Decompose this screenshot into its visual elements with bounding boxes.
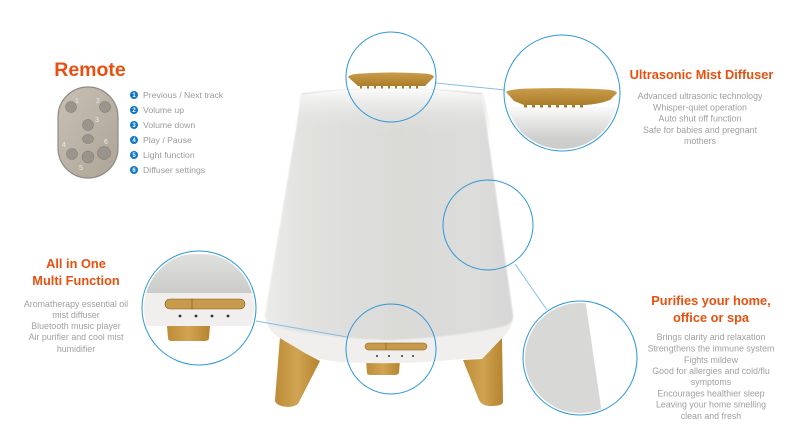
text: ultrasonic list: Whisper-quiet operation bbox=[653, 102, 747, 112]
remote legend: 3 bbox=[132, 123, 136, 129]
text: purifies list: Brings clarity and relaxation bbox=[657, 332, 765, 342]
heading: All in One Multi Function: All in One bbox=[46, 256, 106, 271]
text: purifies list: Encourages healthier sleep bbox=[657, 388, 765, 398]
heading: Remote: Remote bbox=[54, 59, 126, 81]
remote control image: 3 bbox=[95, 117, 99, 124]
text: multi function list: humidifier bbox=[57, 344, 95, 354]
text: ultrasonic list bbox=[638, 91, 763, 146]
connector: side to zoom bbox=[515, 264, 547, 310]
product: diffuser bbox=[265, 88, 513, 407]
heading: Purifies your home, office or spa: Purifies your home, bbox=[651, 293, 771, 308]
remote control image bbox=[58, 87, 118, 178]
connector: controls to zoom bbox=[256, 321, 347, 337]
remote control image: 4 bbox=[62, 142, 66, 149]
remote control image: 5 bbox=[79, 165, 83, 172]
remote control image: 2 bbox=[96, 98, 100, 105]
remote legend: Diffuser settings bbox=[143, 165, 206, 175]
remote legend: Light function bbox=[143, 150, 195, 160]
right wooden leg bbox=[463, 338, 503, 406]
text: purifies list: clean and fresh bbox=[681, 411, 741, 421]
remote legend: Volume down bbox=[143, 120, 195, 130]
callout: controls zoom bbox=[140, 251, 260, 365]
text: multi function list: mist diffuser bbox=[52, 310, 100, 320]
remote legend: 2 bbox=[132, 108, 136, 114]
text: multi function list: Bluetooth music player bbox=[31, 321, 121, 331]
connector: lid to zoom bbox=[436, 83, 505, 90]
remote legend: 6 bbox=[132, 168, 136, 174]
remote legend: Volume up bbox=[143, 105, 184, 115]
left wooden leg bbox=[275, 337, 320, 407]
text: purifies list: Leaving your home smelling bbox=[656, 400, 766, 410]
remote legend: Previous / Next track bbox=[143, 90, 224, 100]
text: ultrasonic list: Safe for babies and pregnant bbox=[643, 125, 758, 135]
control strip bbox=[365, 343, 427, 350]
lid on the top of the diffuser bbox=[348, 72, 434, 88]
text: purifies list: Fights mildew bbox=[684, 355, 739, 365]
text: ultrasonic list: Auto shut off function bbox=[659, 114, 742, 124]
heading: Purifies your home, office or spa: office or spa bbox=[673, 310, 750, 325]
text: ultrasonic list: Advanced ultrasonic technology bbox=[638, 91, 763, 101]
remote control image: 6 bbox=[104, 139, 108, 146]
text: multi function list: Air purifier and cool mist bbox=[29, 332, 124, 342]
remote legend: Play / Pause bbox=[143, 135, 192, 145]
callout: lid zoom bbox=[504, 35, 620, 151]
remote legend: 5 bbox=[132, 153, 136, 159]
heading: All in One Multi Function bbox=[32, 256, 120, 288]
main shade bbox=[265, 88, 513, 340]
callout circle: lid bbox=[346, 32, 436, 122]
heading: Ultrasonic Mist Diffuser: Ultrasonic Mist Diffuser bbox=[630, 67, 773, 82]
text: purifies list: symptoms bbox=[691, 377, 732, 387]
text: purifies list bbox=[648, 332, 774, 421]
text: purifies list: Good for allergies and cold/flu bbox=[652, 366, 770, 376]
text: multi function list bbox=[24, 299, 128, 354]
callout: side zoom bbox=[520, 298, 637, 415]
text: ultrasonic list: mothers bbox=[684, 136, 717, 146]
callout: controls on the product bbox=[346, 304, 436, 394]
text: multi function list: Aromatherapy essential oil bbox=[24, 299, 128, 309]
remote legend bbox=[130, 90, 224, 175]
remote legend: 1 bbox=[132, 93, 136, 99]
text: purifies list: Strengthens the immune system bbox=[648, 344, 774, 354]
remote legend: 4 bbox=[132, 138, 136, 144]
remote control image: 1 bbox=[75, 98, 79, 105]
centre wooden foot bbox=[366, 360, 400, 375]
callout circle: side bbox=[443, 180, 533, 270]
white base bbox=[266, 320, 513, 363]
heading: Purifies your home, office or spa bbox=[651, 293, 771, 325]
heading: All in One Multi Function: Multi Function bbox=[32, 273, 120, 288]
